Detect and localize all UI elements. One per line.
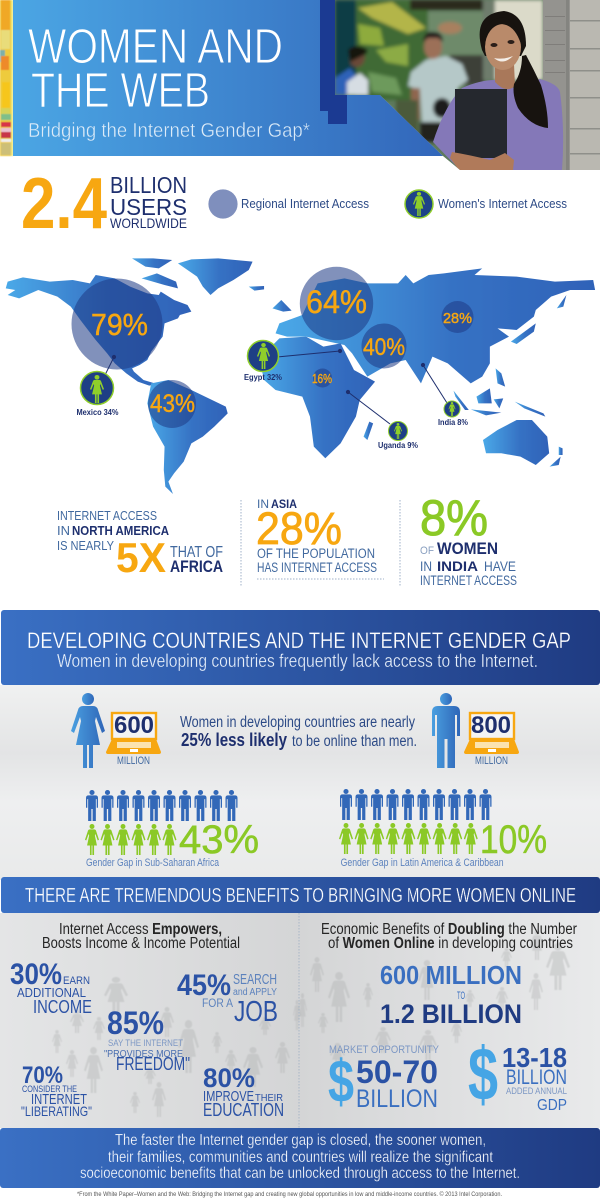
stat: market opportunity: $ — [328, 1048, 354, 1115]
stat: North America vs Africa — [57, 508, 223, 581]
stat: 45%: SEARCH — [233, 971, 277, 988]
marker: Uganda: Uganda 9% — [378, 441, 418, 450]
woman 600 million: MILLION — [117, 755, 150, 767]
stat: 600 million to 1.2 billion: TO — [457, 990, 465, 1002]
heading: empowers: Boosts Income & Income Potential — [42, 935, 240, 952]
stat: Asia: ASIA — [271, 497, 297, 511]
legend: women: Women's Internet Access — [438, 196, 567, 211]
regional percentages: 16% — [312, 371, 332, 386]
stat: Asia: 28% — [256, 503, 342, 554]
pictogram: Sub-Saharan Africa — [85, 790, 259, 869]
stat: North America vs Africa: IN — [57, 523, 70, 538]
footnote: *From the White Paper–Women and the Web: Bridging the Internet gap and creating new global opportunities in low and middle-income countries. © 2013 Intel Corporation. — [77, 1190, 502, 1198]
users headline: 2.4 — [21, 164, 107, 244]
regional percentages — [91, 284, 472, 418]
stat: Asia — [256, 497, 384, 579]
stat: India: HAVE — [484, 558, 516, 574]
regional access circles — [72, 267, 474, 428]
stat: India: INTERNET ACCESS — [420, 573, 517, 588]
stat: 70%: CONSIDER THE — [22, 1084, 77, 1094]
closing banner: their families, communities and countries will realize the significant — [108, 1149, 494, 1166]
stat: 70%: INTERNET — [31, 1091, 87, 1108]
stat: 80%: THEIR — [255, 1093, 283, 1104]
continents — [6, 258, 595, 494]
stat: 85%: FREEDOM" — [116, 1054, 190, 1074]
heading: empowers — [42, 921, 240, 952]
panel: economic benefits — [321, 921, 577, 1116]
heading: economic benefits: of Women Online in developing countries — [328, 935, 573, 952]
marker: Egypt: Egypt 32% — [244, 373, 282, 382]
users headline — [21, 164, 187, 244]
pictogram: Sub-Saharan Africa: 43% — [179, 818, 259, 862]
stat: 80%: 80% — [203, 1063, 255, 1093]
stat: 70%: 70% — [22, 1062, 63, 1089]
stat: North America vs Africa: INTERNET ACCESS — [57, 508, 157, 523]
stat: India: 8% — [420, 490, 488, 546]
stat: 70% — [21, 1062, 92, 1119]
pictogram: Sub-Saharan Africa: Gender Gap in Sub-Saharan Africa — [86, 857, 220, 869]
stat: North America vs Africa: AFRICA — [170, 557, 223, 576]
users headline: WORLDWIDE — [110, 215, 187, 231]
regional percentages: 64% — [306, 284, 367, 320]
marker: Uganda — [378, 422, 418, 450]
photo: woman with folder — [335, 0, 600, 170]
stat: 600 million to 1.2 billion: 1.2 BILLION — [380, 999, 522, 1029]
stat: 30%: 30% — [10, 958, 62, 991]
stat: Asia: HAS INTERNET ACCESS — [257, 560, 377, 575]
stat: Asia: IN — [257, 497, 269, 511]
marker: Mexico — [76, 372, 118, 417]
stat: India: WOMEN — [437, 539, 498, 558]
stat: North America vs Africa: IS NEARLY — [57, 538, 114, 553]
stat: Asia: OF THE POPULATION — [257, 546, 375, 561]
marker: Mexico: Mexico 34% — [76, 408, 118, 417]
stat: 30%: INCOME — [33, 997, 92, 1017]
stat: 600 million to 1.2 billion: 600 MILLION — [380, 960, 522, 990]
stat: 600 million to 1.2 billion — [380, 960, 522, 1029]
stat: 30%: EARN — [63, 975, 90, 987]
stat: added annual GDP: ADDED ANNUAL — [506, 1086, 567, 1096]
stat: 85%: "PROVIDES MORE — [104, 1048, 183, 1060]
regional percentages: 43% — [150, 390, 195, 418]
stat: 70%: "LIBERATING" — [21, 1103, 92, 1119]
stat: 45% — [177, 969, 278, 1028]
marker: India — [438, 401, 468, 427]
stat: India — [420, 490, 517, 588]
stat: 45%: JOB — [234, 996, 278, 1028]
man 800 million: 800 — [471, 712, 511, 739]
benefits section background — [0, 913, 600, 1128]
dark blue step blocks — [320, 0, 347, 124]
regional percentages: 79% — [91, 307, 148, 342]
banner: benefits — [1, 877, 600, 913]
stat: market opportunity — [328, 1044, 440, 1115]
stat: 45%: and APPLY — [233, 987, 277, 998]
stat: added annual GDP: 13-18 — [502, 1042, 567, 1073]
stat: India: IN — [420, 558, 432, 574]
pictogram: Latin America: Gender Gap in Latin America & Caribbean — [341, 857, 504, 869]
stat: 85%: 85% — [107, 1005, 164, 1041]
stat: 80%: IMPROVE — [203, 1088, 254, 1105]
stat: 80% — [203, 1063, 284, 1120]
blue title shape — [13, 0, 443, 156]
stat: India: OF — [420, 545, 434, 557]
pictogram: Latin America: 10% — [480, 818, 547, 862]
connector lines — [105, 349, 447, 424]
stat: India: INDIA — [437, 558, 478, 574]
stat: added annual GDP — [468, 1032, 567, 1116]
stat: added annual GDP: GDP — [537, 1097, 567, 1114]
closing banner: The faster the Internet gender gap is closed, the sooner women, — [115, 1132, 486, 1149]
legend: regional — [208, 189, 369, 219]
subtitle: Bridging the Internet Gender Gap* — [28, 120, 310, 142]
stat: 85% — [104, 1005, 190, 1074]
heading: economic benefits — [321, 921, 577, 952]
stat: market opportunity: BILLION — [356, 1085, 438, 1113]
stat: market opportunity: MARKET OPPORTUNITY — [329, 1044, 440, 1056]
stat: 30%: ADDITIONAL — [17, 985, 86, 1000]
legend: women — [405, 190, 567, 218]
header panel — [0, 0, 600, 170]
legend: regional: Regional Internet Access — [241, 196, 369, 211]
marker: Egypt — [244, 340, 282, 382]
chip image strip — [0, 0, 13, 156]
closing banner: socioeconomic benefits that can be unlocked through access to the Internet. — [80, 1165, 520, 1182]
title: THE WEB — [31, 64, 210, 118]
stat: 85%: SAY THE INTERNET — [108, 1038, 183, 1049]
gender gap section background — [0, 685, 600, 880]
banner: developing countries: Women in developing countries frequently lack access to the Internet. — [57, 651, 538, 671]
woman 600 million — [71, 693, 161, 768]
regional percentages: 28% — [443, 310, 472, 327]
stat: added annual GDP: BILLION — [506, 1066, 567, 1089]
man 800 million — [432, 693, 519, 768]
less likely text — [180, 714, 417, 750]
stat: 80%: EDUCATION — [203, 1100, 284, 1120]
title: WOMEN AND — [28, 20, 283, 74]
stat: North America vs Africa: 5X — [116, 534, 166, 581]
less likely text: Women in developing countries are nearly — [180, 714, 415, 731]
less likely text: 25% less likely — [181, 730, 287, 750]
world map — [6, 258, 595, 494]
panel: empowers — [10, 921, 284, 1120]
stat: 45%: 45% — [177, 969, 231, 1002]
users headline: USERS — [110, 194, 187, 220]
stat: North America vs Africa: THAT OF — [170, 544, 223, 561]
pictogram: Latin America — [339, 789, 547, 869]
marker: India: India 8% — [438, 418, 468, 427]
stat: added annual GDP: $ — [468, 1032, 498, 1116]
heading: economic benefits: Economic Benefits of Doubling the Number — [321, 921, 577, 938]
banner: developing countries — [1, 610, 600, 685]
heading: empowers: Internet Access Empowers, — [59, 921, 222, 938]
man 800 million: MILLION — [475, 755, 508, 767]
stat: 45%: FOR A — [202, 996, 233, 1010]
stat: market opportunity: 50-70 — [356, 1054, 438, 1090]
regional percentages: 40% — [363, 334, 405, 361]
stat: 30% — [10, 958, 92, 1017]
title — [28, 20, 283, 118]
users headline: BILLION — [110, 172, 187, 198]
woman 600 million: 600 — [114, 712, 154, 739]
closing banner — [0, 1128, 600, 1188]
woman figure — [433, 79, 563, 170]
stat: North America vs Africa: NORTH AMERICA — [72, 523, 170, 538]
less likely text: to be online than men. — [292, 733, 417, 750]
background crowd figures — [52, 930, 570, 1117]
